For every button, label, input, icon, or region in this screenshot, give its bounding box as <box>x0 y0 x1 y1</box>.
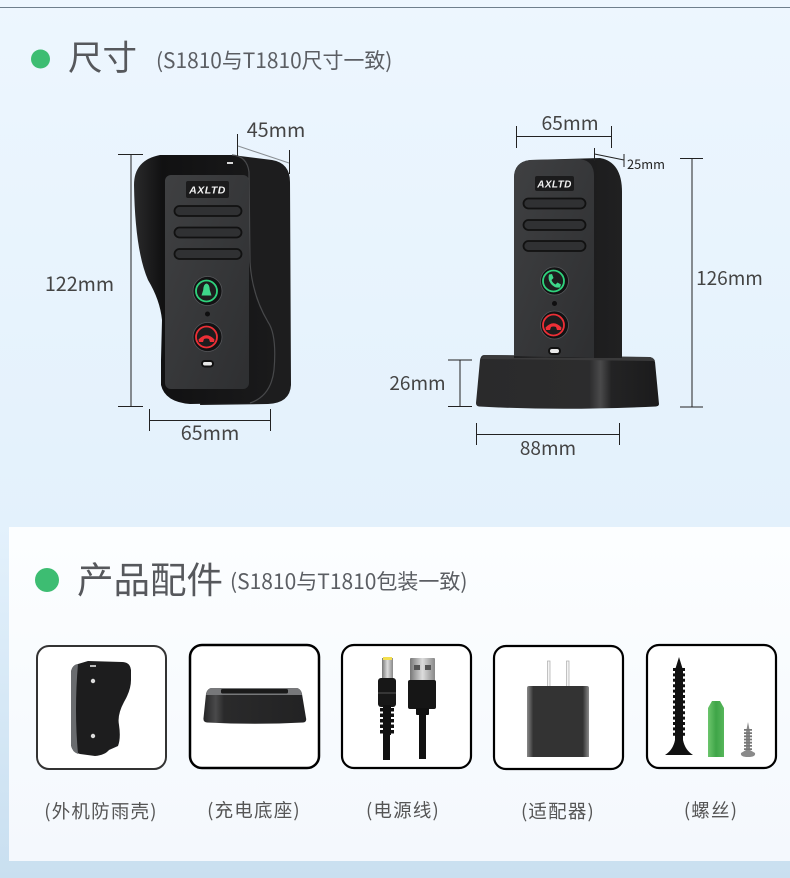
indicator light <box>201 360 214 368</box>
icon: small screw <box>741 722 755 757</box>
icon: green dot <box>31 50 50 68</box>
label: (螺丝) <box>684 797 738 823</box>
speaker slots <box>524 198 586 251</box>
dimension: 26mm base height <box>389 360 472 406</box>
dimension: 26mm base height: 26mm <box>389 369 446 396</box>
indicator light <box>548 347 561 355</box>
hood rim highlight <box>232 155 275 403</box>
dimension: 122mm height <box>45 154 143 406</box>
dimension: 126mm height: 126mm <box>696 264 763 291</box>
card: rain shell <box>37 646 166 769</box>
logo <box>186 181 229 198</box>
heading: accessories <box>35 551 468 604</box>
icon: green dot <box>35 568 59 592</box>
icon: USB plug <box>408 658 436 759</box>
icon: wall anchor <box>708 701 724 757</box>
icon: adapter <box>527 661 589 757</box>
heading text: 尺寸 <box>68 30 137 80</box>
hood front <box>134 155 275 404</box>
dimension: 65mm width of unit: 65mm <box>541 108 599 136</box>
card: adapter <box>494 646 623 769</box>
dimension: 45mm depth: 45mm <box>247 114 305 143</box>
logo: AXLTD <box>188 184 226 196</box>
hood top notch <box>227 162 233 164</box>
dimension: 25mm depth <box>594 148 665 173</box>
heading note: (S1810与T1810尺寸一致) <box>156 45 392 75</box>
heading: dimensions <box>31 30 392 80</box>
dimension: 65mm width of unit <box>516 108 612 148</box>
dimension: 65mm width: 65mm <box>181 417 239 446</box>
device: indoor unit on charging base <box>476 158 659 409</box>
icon: DC plug <box>378 657 396 760</box>
bell button <box>193 276 222 306</box>
label: (外机防雨壳) <box>44 798 158 824</box>
dimension: 88mm base width: 88mm <box>520 434 576 461</box>
icon: large screw <box>665 657 693 755</box>
hang-up button <box>540 311 568 339</box>
microphone <box>552 301 557 306</box>
answer button <box>540 267 568 295</box>
dimension: 65mm width <box>150 409 270 446</box>
speaker slots <box>174 206 242 259</box>
unit front <box>514 159 594 358</box>
dimension: 25mm depth: 25mm <box>627 154 665 173</box>
dimension: 45mm depth <box>238 114 305 174</box>
card: screws <box>647 645 776 768</box>
unit side <box>514 158 622 358</box>
dimension: 88mm base width <box>476 423 620 461</box>
charging base <box>476 355 659 409</box>
heading note: (S1810与T1810包装一致) <box>230 566 468 596</box>
label: (电源线) <box>366 797 440 823</box>
icon: rain shell <box>71 661 131 756</box>
logo: AXLTD <box>536 180 572 190</box>
heading text: 产品配件 <box>77 551 223 604</box>
top rule <box>0 6 790 8</box>
card: charging base <box>190 645 319 768</box>
panel: accessories <box>9 527 790 861</box>
logo <box>535 176 574 191</box>
dimension: 126mm height <box>680 158 763 407</box>
back of hood <box>200 155 291 405</box>
label: (适配器) <box>521 798 595 824</box>
dimension: 122mm height: 122mm <box>45 268 114 297</box>
icon: charging base <box>203 688 306 724</box>
hang-up button <box>193 322 222 352</box>
device: outdoor unit with rain hood <box>134 155 291 405</box>
faceplate <box>165 175 249 389</box>
microphone <box>205 312 210 316</box>
label: (充电底座) <box>207 797 301 823</box>
card: power cable <box>342 645 471 768</box>
